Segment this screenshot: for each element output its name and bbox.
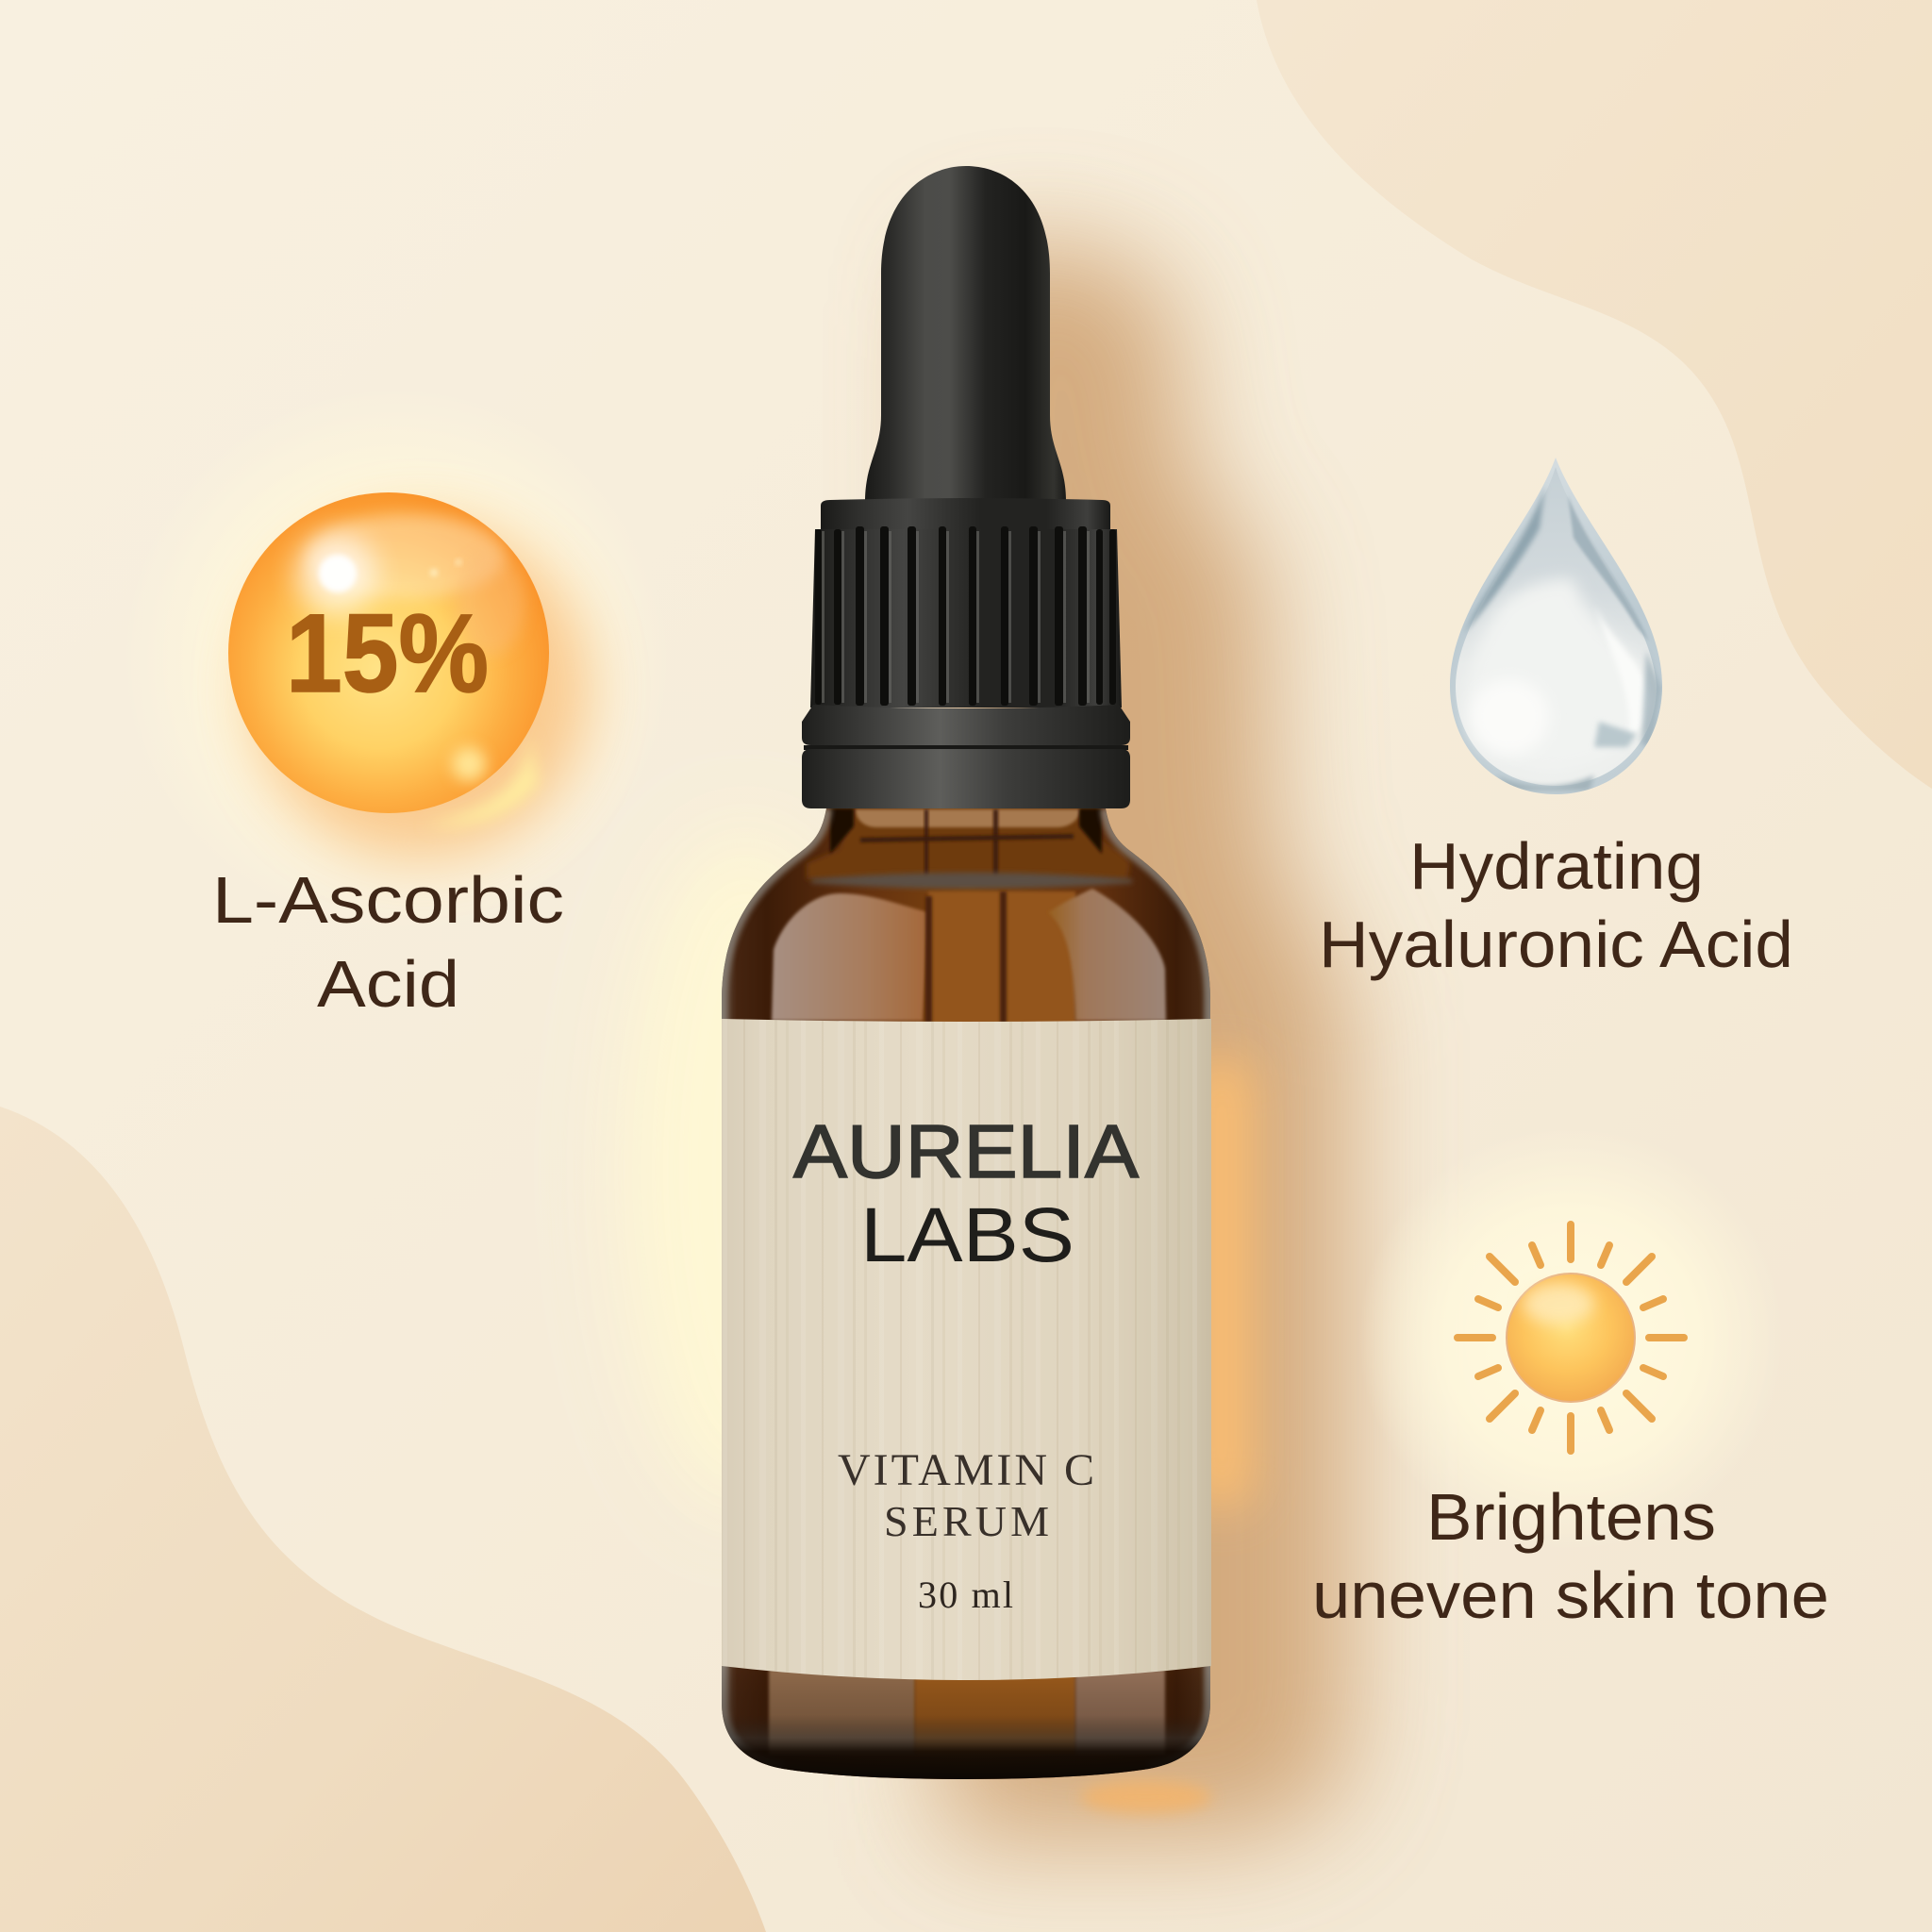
label: hyaluronic acid (1319, 829, 1793, 981)
label (722, 1019, 1211, 1680)
background blob: top right (1257, 0, 1932, 789)
volume: 30 ml (918, 1574, 1013, 1616)
bottle (717, 166, 1217, 1783)
label: l-ascorbic acid: L-Ascorbic (212, 863, 564, 937)
lower glass (769, 1670, 915, 1755)
label: brightens (1312, 1480, 1829, 1632)
label: brightens: uneven skin tone (1312, 1558, 1829, 1632)
icon: sun (1358, 1125, 1783, 1550)
dropper bulb (865, 166, 1066, 502)
brand name (793, 1109, 1140, 1278)
label: hyaluronic acid: Hyaluronic Acid (1319, 908, 1793, 981)
glass rim light (722, 808, 1210, 1769)
shoulder reflection right (1048, 889, 1166, 1021)
brand name: LABS (860, 1192, 1074, 1278)
brand name: AURELIA (793, 1109, 1140, 1193)
sun disc (1507, 1274, 1635, 1402)
background blob: bottom left (0, 1107, 766, 1932)
capsule sphere (228, 492, 549, 813)
label: l-ascorbic acid (212, 863, 564, 1021)
capsule percentage: 15% (286, 591, 489, 716)
product name: SERUM (884, 1497, 1049, 1545)
product name (838, 1445, 1094, 1545)
shoulder reflection left (772, 893, 928, 1021)
label: hyaluronic acid: Hydrating (1409, 829, 1704, 903)
bottle shadow and glow (623, 243, 1349, 1840)
capsule glow (123, 387, 670, 934)
dropper collar (802, 498, 1130, 808)
icon: water drop (1450, 458, 1662, 794)
ingredient: vitamin C capsule (215, 485, 623, 891)
sun rays (1457, 1224, 1684, 1451)
label: l-ascorbic acid: Acid (317, 947, 459, 1021)
product name: VITAMIN C (838, 1445, 1094, 1495)
amber glass body (717, 802, 1217, 1783)
label: brightens: Brightens (1426, 1480, 1716, 1554)
